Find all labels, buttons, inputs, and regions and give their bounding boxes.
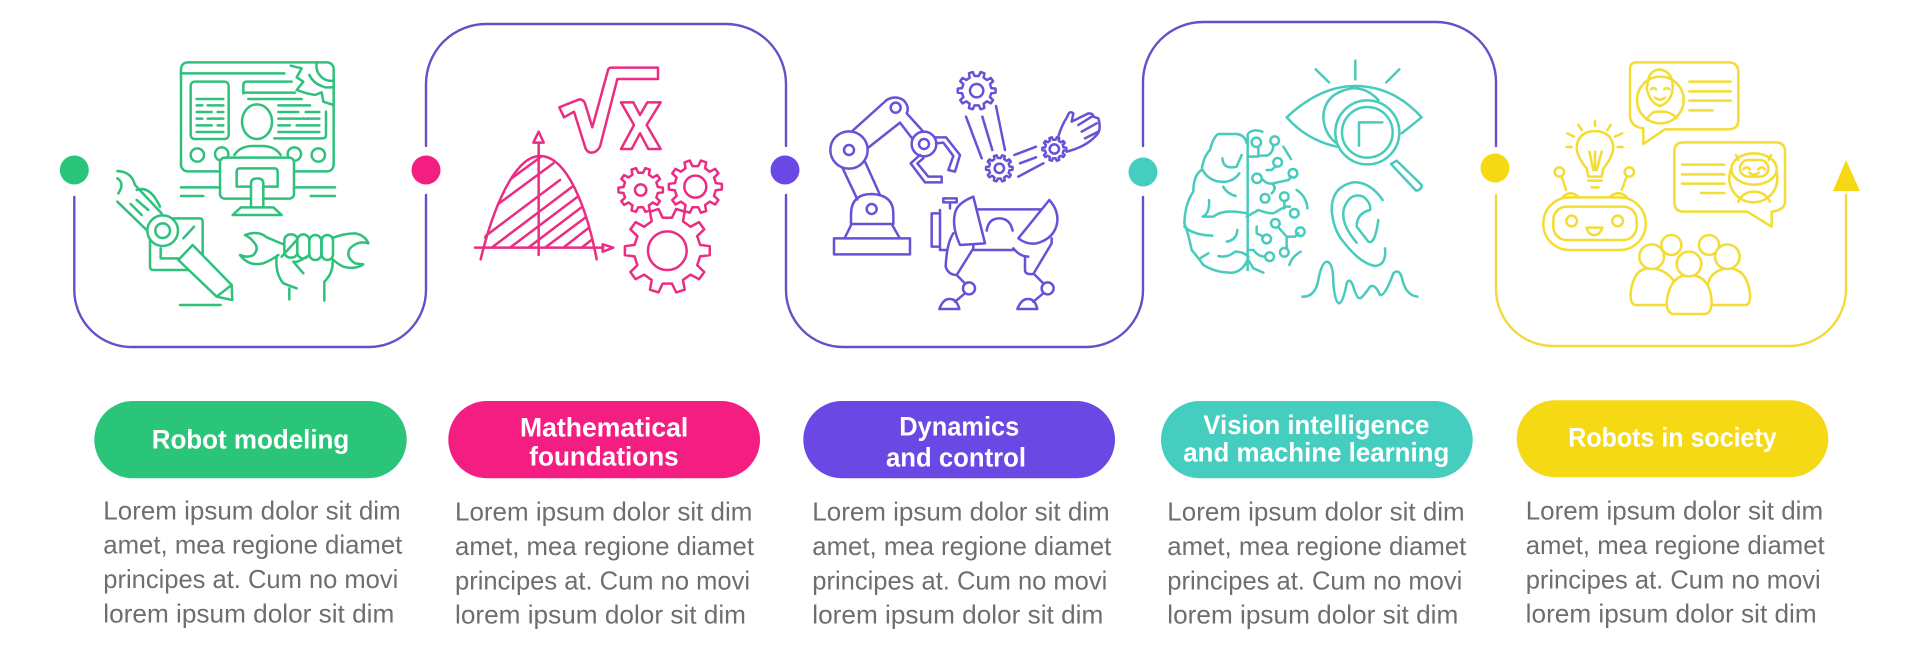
step marker: green dot [60, 156, 89, 184]
text block: vision intelligence: Lorem ipsum dolor sit dim [1167, 497, 1465, 527]
text block: robots in society: amet, mea regione diamet [1526, 530, 1825, 560]
label card: robots in society [1517, 400, 1828, 477]
text block: mathematical foundations [455, 497, 755, 630]
text block: mathematical foundations: amet, mea regione diamet [455, 531, 755, 561]
icon: brain, eye, ear and sound wave [1184, 61, 1422, 303]
label card: dynamics and control: and control [886, 443, 1026, 473]
label card: vision intelligence and machine learning: and machine learning [1183, 438, 1449, 468]
step marker: yellow dot [1480, 154, 1510, 182]
text block: dynamics and control: lorem ipsum dolor sit dim [812, 600, 1103, 630]
panel: robot modeling [117, 62, 368, 305]
label card: robot modeling [94, 401, 407, 478]
label card: dynamics and control [803, 401, 1115, 478]
icon: computer, robot arm and wrench [117, 62, 368, 305]
text block: robot modeling: amet, mea regione diamet [103, 530, 403, 560]
text block: vision intelligence: lorem ipsum dolor sit dim [1167, 600, 1458, 630]
text block: robots in society [1526, 496, 1825, 629]
label card: mathematical foundations: Mathematical [520, 413, 688, 443]
panel: robots in society [1543, 62, 1785, 314]
panel: mathematical foundations [470, 68, 722, 292]
text block: mathematical foundations: Lorem ipsum dolor sit dim [455, 497, 752, 527]
text block: robot modeling [103, 495, 403, 628]
icon: parabola, root formula and gears [470, 68, 722, 292]
label card: mathematical foundations: foundations [529, 442, 679, 472]
label card: vision intelligence and machine learning [1161, 401, 1473, 478]
label card: robots in society: Robots in society [1568, 423, 1777, 453]
text block: robot modeling: lorem ipsum dolor sit dim [103, 598, 394, 628]
arrow head [1833, 160, 1860, 191]
text block: robot modeling: principes at. Cum no movi [103, 564, 398, 594]
text block: vision intelligence: principes at. Cum no movi [1167, 565, 1462, 595]
text block: robots in society: Lorem ipsum dolor sit dim [1526, 496, 1823, 526]
flow path connector [74, 22, 1846, 347]
text block: dynamics and control [812, 497, 1112, 630]
label card: dynamics and control: Dynamics [899, 412, 1019, 442]
text block: dynamics and control: Lorem ipsum dolor sit dim [812, 497, 1110, 527]
text block: vision intelligence: amet, mea regione diamet [1167, 531, 1467, 561]
label card: vision intelligence and machine learning: Vision intelligence [1203, 410, 1429, 440]
text block: robots in society: lorem ipsum dolor sit dim [1526, 599, 1817, 629]
text block: mathematical foundations: lorem ipsum dolor sit dim [455, 600, 746, 630]
text block: vision intelligence [1167, 497, 1467, 630]
panel: vision intelligence and machine learning [1184, 61, 1422, 303]
text block: robot modeling: Lorem ipsum dolor sit dim [103, 495, 401, 525]
text block: dynamics and control: principes at. Cum no movi [812, 565, 1107, 595]
text block: dynamics and control: amet, mea regione diamet [812, 531, 1112, 561]
icon: robot arm, robotic dog and hand [830, 72, 1100, 309]
panel: dynamics and control [830, 72, 1100, 309]
step marker: pink dot [412, 156, 440, 184]
icon: chat bot, speech bubbles and people [1543, 62, 1785, 314]
step marker: teal dot [1128, 158, 1158, 186]
label card: mathematical foundations [448, 401, 760, 478]
text block: mathematical foundations: principes at. Cum no movi [455, 565, 750, 595]
label card: robot modeling: Robot modeling [152, 424, 349, 454]
text block: robots in society: principes at. Cum no movi [1526, 564, 1821, 594]
step marker: purple dot [770, 156, 800, 184]
